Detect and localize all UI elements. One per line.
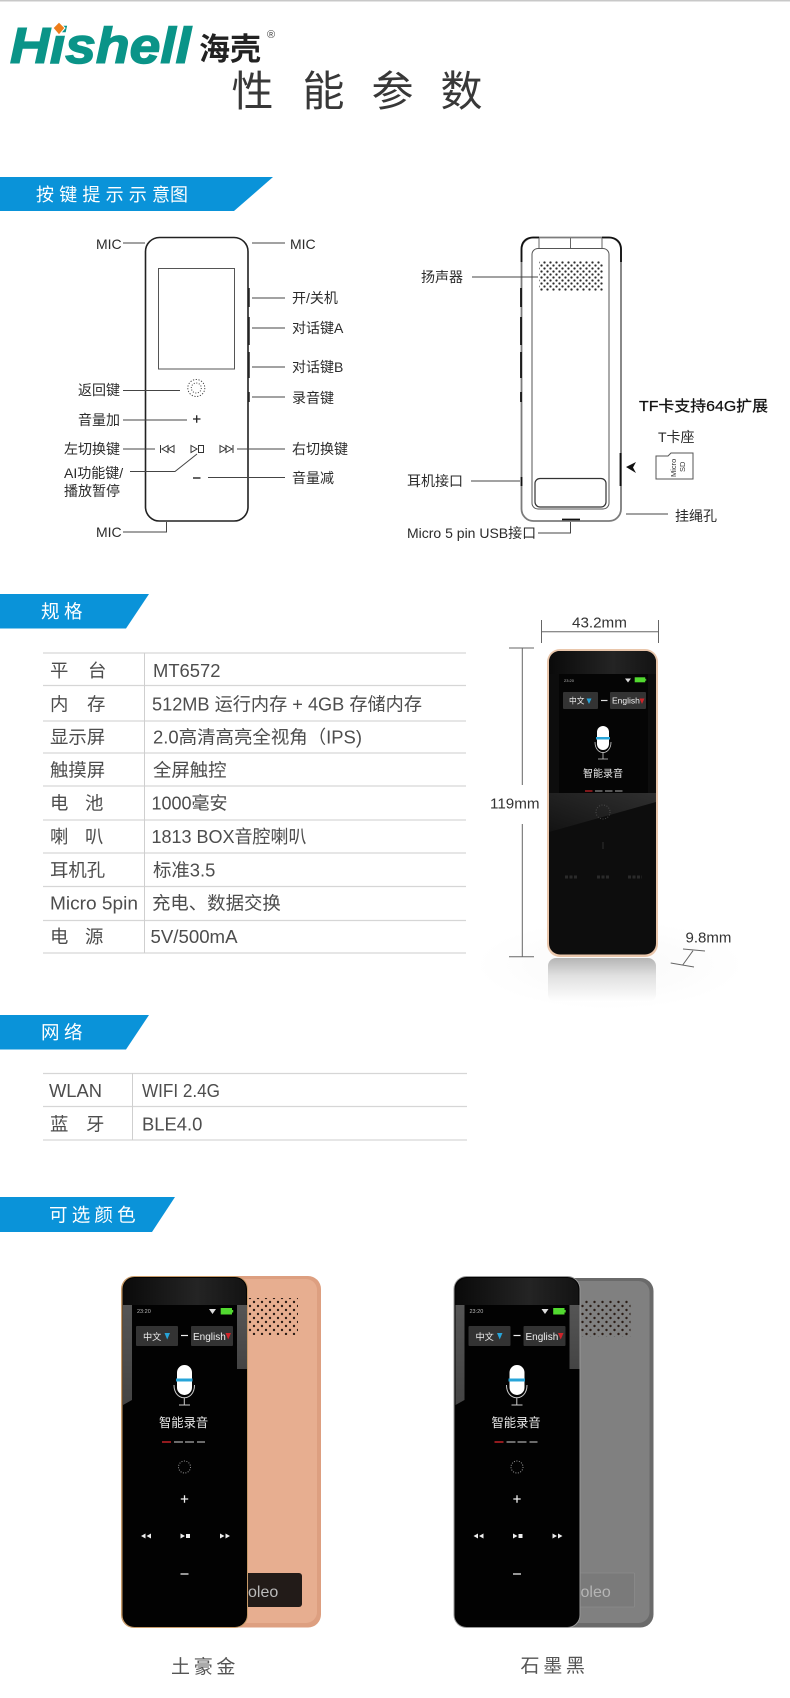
floor shadow: [475, 920, 745, 1010]
icon: play pause: [191, 446, 197, 452]
language selectors: 中文: [569, 696, 585, 706]
icon: next: [220, 445, 233, 453]
TF card note: TF卡支持64G扩展: [639, 398, 768, 415]
labels back: T卡座: [658, 429, 695, 445]
section banner: specs: 规格: [41, 601, 83, 622]
labels front: 录音键: [292, 390, 334, 406]
page dots: [162, 1441, 171, 1443]
labels front: MIC: [96, 236, 122, 252]
top rule: [0, 0, 790, 2]
screen caption: 智能录音: [159, 1415, 208, 1430]
color name: 土豪金: [171, 1656, 235, 1678]
row: power: 5V/500mA: [150, 926, 238, 947]
section banner: key guide: 按键提示示意图: [36, 185, 188, 205]
color name: 石墨黑: [520, 1656, 585, 1677]
row: micro usb: 充电、数据交换: [152, 892, 281, 914]
product: graphite: [454, 1276, 654, 1677]
labels back: 扬声器: [421, 269, 463, 285]
icon: micro sd card: SD: [678, 461, 687, 472]
speaker grille: [248, 1298, 298, 1335]
device body: [547, 649, 658, 957]
row: earphone: 标准3.5: [153, 860, 215, 880]
title: 性能参数: [232, 68, 483, 115]
row: touch: 触摸屏: [50, 760, 105, 780]
reflection: [548, 958, 656, 1002]
row: platform: MT6572: [153, 660, 220, 681]
back body: [190, 1276, 321, 1628]
row: display: 2.0高清高亮全视角（IPS): [153, 726, 362, 748]
dimension labels: 9.8mm: [686, 930, 731, 946]
row: memory: 内存: [50, 694, 105, 714]
screen: [559, 674, 648, 793]
gloss band: [549, 793, 656, 832]
arrow: card insert: [626, 462, 636, 473]
dimension labels: 43.2mm: [572, 614, 627, 632]
bottom plate: [535, 478, 606, 507]
status bar: 23:20: [470, 1309, 483, 1315]
icon: micro sd card: Micro: [669, 459, 678, 477]
row: bluetooth: [50, 1114, 202, 1134]
language selectors: English: [612, 696, 640, 706]
row: touch: [50, 760, 227, 780]
row: speaker: 喇叭: [50, 826, 103, 847]
logo: [10, 18, 275, 74]
row: speaker: 1813 BOX音腔喇叭: [152, 826, 306, 847]
language selectors: 中文: [143, 1331, 161, 1342]
icon: plus: [193, 415, 200, 423]
language selectors: [563, 692, 646, 709]
labels back: [407, 269, 717, 541]
row: platform: [50, 660, 220, 681]
screen caption: 智能录音: [492, 1415, 541, 1430]
labels front: 播放暂停: [64, 483, 120, 499]
speaker grille: [580, 1300, 630, 1337]
back plate: [240, 1573, 302, 1607]
row: display: [50, 726, 362, 748]
leader lines back: [471, 277, 668, 533]
labels front: 右切换键: [292, 441, 348, 457]
section banner: network: 网络: [41, 1022, 83, 1043]
row: touch: 全屏触控: [153, 760, 227, 780]
logo: 海壳: [199, 32, 261, 67]
logo: Hishell: [10, 18, 192, 74]
row: micro usb: [50, 892, 281, 914]
speaker grille: [539, 261, 603, 291]
logo: ®: [267, 29, 275, 41]
diagram: front of device: [64, 236, 348, 540]
labels front: 对话键A: [292, 320, 344, 336]
row: battery: 电池: [50, 792, 103, 814]
screen outline: [158, 268, 234, 369]
dimension lines: [509, 620, 705, 967]
dimension labels: [490, 614, 731, 946]
labels front: AI功能键/: [64, 465, 123, 481]
side controls: [521, 288, 620, 520]
row: display: 显示屏: [50, 726, 105, 748]
dimension labels: 119mm: [490, 796, 540, 812]
network table: [43, 1073, 467, 1140]
labels front: 左切换键: [64, 441, 120, 457]
top bezel: [549, 651, 656, 674]
row: earphone: 耳机孔: [50, 860, 105, 880]
row: platform: 平台: [50, 660, 106, 681]
row: wlan: WLAN: [49, 1080, 102, 1101]
front controls: [474, 1461, 562, 1574]
section banner: colors: [0, 1197, 175, 1232]
row: bluetooth: 蓝牙: [50, 1114, 104, 1134]
row: wlan: [49, 1080, 220, 1101]
gloss sides: [570, 1305, 580, 1369]
status bar: 23:20: [564, 678, 575, 683]
icon: home ring: [188, 380, 205, 396]
row: battery: 1000毫安: [152, 792, 228, 814]
status bar: [564, 677, 646, 683]
labels front: 开/关机: [292, 290, 338, 306]
front body: [121, 1276, 248, 1628]
status bar: [137, 1308, 233, 1315]
labels front: [64, 236, 348, 540]
back plate: [572, 1573, 634, 1607]
labels front: 对话键B: [292, 359, 343, 375]
row: wlan: WIFI 2.4G: [142, 1080, 220, 1101]
row: power: 电源: [50, 926, 103, 947]
product: graphite: oleo: [580, 1584, 611, 1601]
gloss top: [456, 1278, 578, 1305]
front body: [454, 1276, 580, 1628]
section banner: network: [0, 1015, 149, 1050]
device dimension figure: [475, 614, 745, 1010]
section banner: colors: 可选颜色: [49, 1204, 136, 1226]
leader lines front: [123, 243, 285, 532]
page dots: [585, 790, 592, 792]
section banner: key guide: [0, 177, 273, 211]
labels front: MIC: [96, 524, 122, 540]
status bar: [470, 1308, 566, 1315]
top notches: [539, 238, 602, 248]
row: earphone: [50, 860, 215, 880]
row: bluetooth: BLE4.0: [142, 1114, 202, 1134]
device outline front: [146, 238, 248, 521]
icon: microphone: [174, 1365, 194, 1405]
back body: [522, 1278, 654, 1628]
labels front: 音量减: [292, 470, 334, 486]
labels front: 返回键: [78, 382, 120, 398]
icon: microphone: [506, 1365, 527, 1405]
icon: micro sd card: [656, 453, 693, 479]
language selectors: English: [193, 1332, 226, 1343]
spec table: [43, 653, 466, 953]
gloss top: [123, 1278, 246, 1305]
labels back: 耳机接口: [407, 473, 463, 489]
gloss sides: [237, 1305, 247, 1369]
labels front: 音量加: [78, 412, 120, 428]
inner panel: [532, 248, 609, 509]
front controls: [141, 1461, 230, 1574]
language selectors: [468, 1326, 566, 1346]
language selectors: English: [526, 1332, 558, 1343]
status bar: 23:20: [137, 1309, 151, 1315]
page dots: [494, 1441, 504, 1443]
diagram: back of device: [407, 238, 768, 541]
icon: minus: [193, 477, 200, 479]
language selectors: 中文: [476, 1331, 494, 1342]
language selectors: [136, 1326, 233, 1346]
labels back: 挂绳孔: [675, 508, 717, 524]
icon: microphone: [595, 726, 611, 759]
labels back: Micro 5 pin USB接口: [407, 525, 536, 541]
row: power: [50, 926, 238, 947]
product: gold: [121, 1276, 321, 1678]
faint buttons: [565, 805, 642, 877]
row: speaker: [50, 826, 306, 847]
product: gold: oleo: [248, 1584, 278, 1601]
side buttons: [248, 288, 250, 402]
row: battery: [50, 792, 228, 814]
icon: previous: [160, 445, 174, 453]
labels front: MIC: [290, 236, 316, 252]
row: micro usb: Micro 5pin: [50, 892, 138, 914]
row: memory: 512MB 运行内存 + 4GB 存储内存: [152, 694, 422, 714]
device outline back: [522, 238, 621, 521]
screen caption: 智能录音: [583, 767, 623, 780]
top corners: [522, 238, 621, 262]
section banner: specs: [0, 594, 149, 628]
